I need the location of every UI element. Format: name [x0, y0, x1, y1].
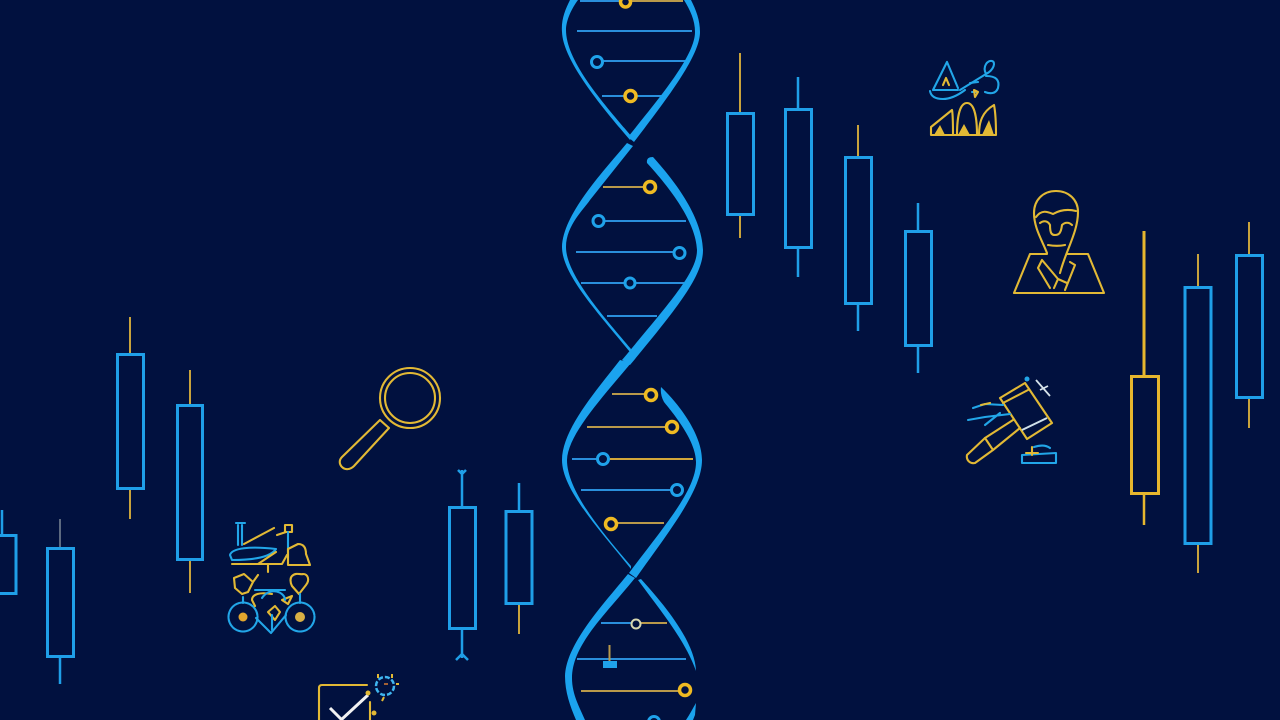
- DNA double helix: [562, 0, 703, 720]
- candlesticks: far right group: [1132, 222, 1262, 573]
- candlesticks: centre left group: [450, 470, 532, 660]
- icon: person: [1014, 191, 1104, 293]
- icon: gavel: [967, 376, 1056, 463]
- candlesticks: upper right group: [728, 53, 932, 373]
- candlesticks: lower left edge group: [0, 510, 74, 684]
- icon: magnifying glass: [340, 368, 440, 469]
- helix strands: [562, 0, 703, 720]
- helix rungs: [572, 1, 693, 691]
- helix nodes: [592, 0, 690, 720]
- icon: checkbox and light bulb: [319, 674, 399, 720]
- icon: scales and charts: [930, 61, 998, 135]
- candlesticks: left group: [118, 317, 202, 593]
- icon: machinery and gears: [228, 523, 314, 633]
